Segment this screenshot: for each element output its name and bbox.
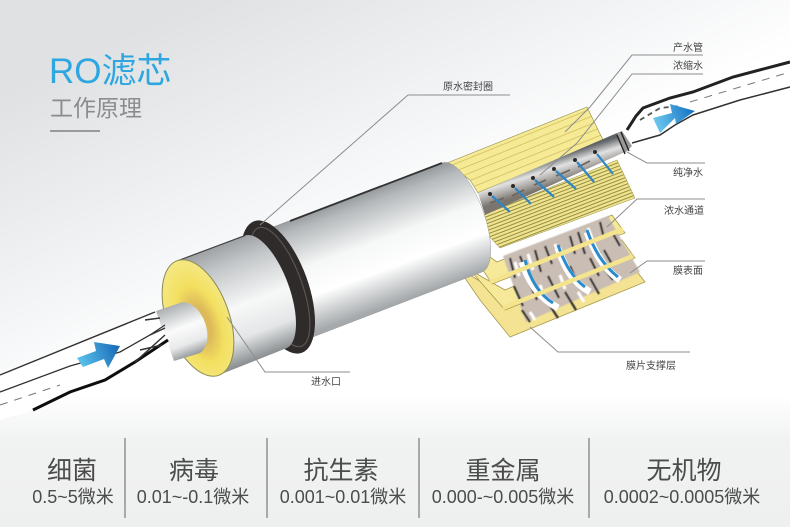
label: 原水密封圈: 原水密封圈 — [443, 80, 493, 93]
membrane surface patches — [503, 216, 640, 322]
icon: right blue water arrow — [653, 104, 695, 133]
contaminant: virus — [137, 457, 249, 507]
label: 进水口: 进水口 — [311, 376, 341, 388]
contaminant: antibiotics: 0.001~0.01微米 — [280, 487, 406, 507]
upper yellow membrane layer — [470, 215, 625, 284]
pipe pins with blue flow — [488, 150, 613, 212]
yellow membrane roll top — [447, 107, 603, 193]
middle yellow membrane layer — [463, 240, 635, 310]
label: 产水管: 产水管 — [673, 41, 703, 54]
contaminant: bacteria: 0.5~5微米 — [32, 487, 114, 507]
contaminant: inorganics: 0.0002~0.0005微米 — [604, 487, 760, 507]
central product water pipe — [478, 131, 632, 215]
contaminant: antibiotics — [280, 457, 406, 507]
icon: left blue water arrow — [77, 342, 120, 368]
right water outlet tube — [627, 62, 790, 143]
label: 浓缩水: 浓缩水 — [673, 59, 703, 72]
contaminant: antibiotics: 抗生素 — [303, 457, 379, 485]
label: 膜片支撑层: 膜片支撑层 — [626, 359, 676, 372]
main membrane cylinder — [265, 162, 491, 340]
label: 纯净水: 纯净水 — [673, 166, 703, 179]
yellow end disc — [148, 250, 248, 386]
contaminant: heavy metals: 重金属 — [465, 457, 541, 485]
left water inlet tube — [0, 312, 170, 420]
cylinder flange — [177, 235, 296, 375]
contaminant: bacteria — [32, 457, 114, 507]
black seal ring — [226, 211, 330, 363]
contaminant: inorganics — [604, 457, 760, 507]
subtitle: 工作原理 — [50, 95, 142, 121]
label: 膜表面: 膜表面 — [673, 264, 703, 277]
leader lines — [227, 55, 705, 372]
contaminant: bacteria: 细菌 — [47, 457, 97, 485]
column dividers — [125, 438, 589, 518]
title: RO滤芯 — [49, 52, 172, 91]
contaminant: virus: 病毒 — [169, 457, 219, 485]
contaminant: heavy metals — [432, 457, 574, 507]
title rule — [50, 130, 100, 132]
striped membrane folds — [483, 160, 635, 248]
cylinder top edge — [290, 163, 442, 221]
contaminant: virus: 0.01~-0.1微米 — [137, 487, 249, 507]
inner feed pipe — [156, 302, 207, 361]
contaminant: inorganics: 无机物 — [646, 457, 722, 485]
yellow strips over membrane — [490, 229, 633, 308]
bottom yellow membrane layer — [458, 260, 645, 337]
water flow streaks in membrane — [522, 230, 620, 308]
label: 浓水通道: 浓水通道 — [664, 204, 704, 217]
contaminant: heavy metals: 0.000-~0.005微米 — [432, 487, 574, 507]
